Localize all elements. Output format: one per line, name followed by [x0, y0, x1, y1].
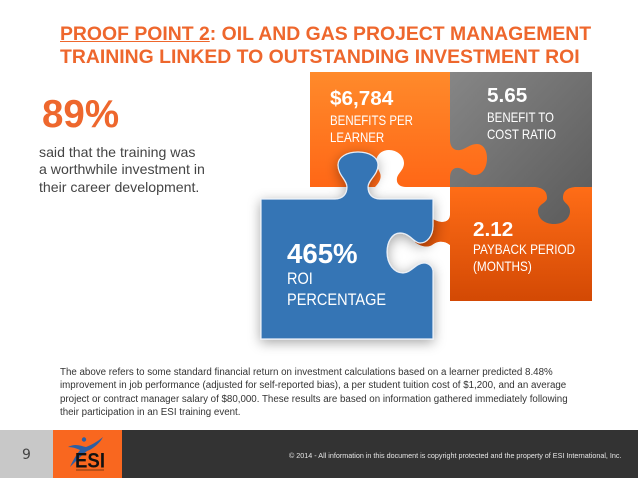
label: benefit to cost ratio: BENEFIT TO	[487, 109, 554, 125]
title: PROOF POINT 2: OIL AND GAS PROJECT MANAGEMENT	[60, 23, 591, 45]
label: benefits per learner: BENEFITS PER	[330, 112, 413, 128]
text: stat description: said that the training was	[39, 144, 195, 160]
logo block	[53, 430, 122, 478]
text: stat description: a worthwhile investment in	[39, 161, 205, 177]
icon: ESI logo: ESI	[75, 450, 105, 472]
icon: ESI logo	[68, 437, 105, 472]
label: ROI percentage: PERCENTAGE	[287, 290, 386, 309]
puzzle slot: empty white notch	[375, 150, 406, 187]
text: methodology note	[60, 367, 568, 418]
stat: 89%: 89%	[42, 93, 119, 136]
text: methodology note: project or contract manager salary of $80,000. These results are based on information gathered immediately following	[60, 394, 568, 405]
label: ROI percentage: ROI	[287, 269, 313, 288]
puzzle piece: payback period	[415, 187, 592, 301]
puzzle piece: ROI percentage	[261, 152, 433, 339]
copyright: © 2014 - All information in this document is copyright protected and the property of ESI International, Inc.	[289, 451, 622, 460]
label: benefit to cost ratio	[487, 84, 556, 142]
title	[60, 23, 591, 68]
puzzle piece: benefit to cost ratio	[450, 72, 592, 224]
label: payback period: 2.12	[473, 218, 513, 241]
text: methodology note: their participation in an ESI training event.	[60, 407, 240, 418]
label: benefits per learner: LEARNER	[330, 129, 384, 145]
label: ROI percentage	[287, 238, 386, 309]
text: methodology note: The above refers to some standard financial return on investment calculations based on a learner predicted 8.48%	[60, 367, 553, 378]
label: payback period: PAYBACK PERIOD	[473, 240, 575, 256]
footer bar	[0, 430, 638, 478]
label: ROI percentage: 465%	[287, 238, 358, 269]
text: stat description	[39, 144, 205, 195]
label: benefits per learner: $6,784	[330, 86, 393, 110]
label: benefits per learner	[330, 86, 413, 145]
label: benefit to cost ratio: COST RATIO	[487, 126, 556, 142]
puzzle piece: benefits per learner	[310, 72, 487, 187]
label: payback period: (MONTHS)	[473, 258, 532, 274]
page number block: 9	[22, 447, 31, 463]
page number block	[0, 430, 53, 478]
label: payback period	[473, 218, 575, 274]
text: stat description: their career development.	[39, 179, 199, 195]
title: TRAINING LINKED TO OUTSTANDING INVESTMENT ROI	[60, 46, 580, 68]
text: methodology note: improvement in job performance (adjusted for self-reported bias), a per student tuition cost of $1,200, and an average	[60, 380, 566, 391]
label: benefit to cost ratio: 5.65	[487, 84, 527, 107]
